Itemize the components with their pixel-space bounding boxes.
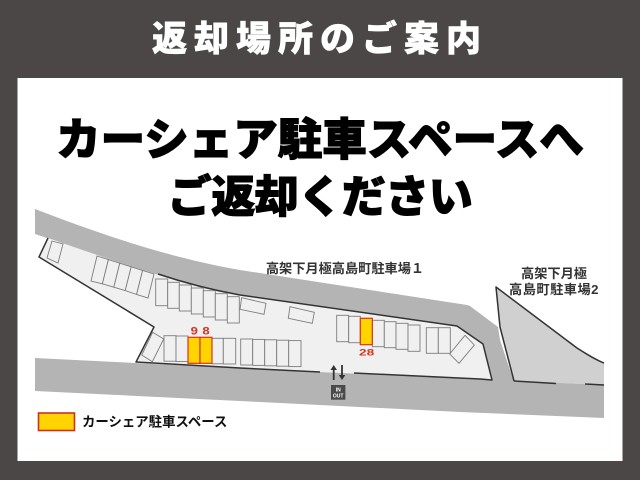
label: parking lot 2	[509, 265, 599, 297]
legend	[38, 413, 227, 430]
lot 2 ground	[496, 287, 604, 385]
icon: in/out sign: OUT	[333, 394, 343, 400]
parking stalls: right block	[337, 315, 474, 363]
car share space 28	[360, 318, 372, 345]
car share space 8	[200, 337, 212, 363]
heading: ご返却ください	[168, 172, 472, 222]
parking stalls: lower row	[142, 332, 301, 367]
road: upper elevated road	[35, 209, 514, 382]
label: space 8: 8	[202, 325, 210, 337]
panel: map card	[18, 78, 622, 461]
parking stalls: upper left	[47, 241, 154, 298]
lot 1 ground	[39, 238, 492, 380]
label: space 9: 9	[191, 325, 198, 337]
icon: entrance arrows	[330, 365, 345, 380]
label: parking lot 1: 高架下月極高島町駐車場１	[266, 260, 424, 276]
car share space 9	[188, 337, 200, 363]
icon: in/out sign: IN	[336, 388, 341, 394]
heading: カーシェア駐車スペースへ	[56, 116, 584, 165]
label: parking lot 2: 高島町駐車場2	[509, 281, 599, 297]
label: space 28: 28	[359, 348, 374, 359]
road: lower street	[35, 358, 604, 418]
heading	[56, 116, 584, 222]
map: parking layout	[35, 209, 604, 418]
header title: 返却場所のご案内	[152, 19, 488, 59]
legend swatch	[38, 413, 74, 430]
lot outlines	[39, 238, 604, 385]
parking stalls: upper middle row	[156, 279, 314, 323]
label: parking lot 2: 高架下月極	[521, 265, 587, 281]
icon: in/out sign	[331, 385, 345, 400]
legend label: カーシェア駐車スペース	[82, 414, 227, 430]
